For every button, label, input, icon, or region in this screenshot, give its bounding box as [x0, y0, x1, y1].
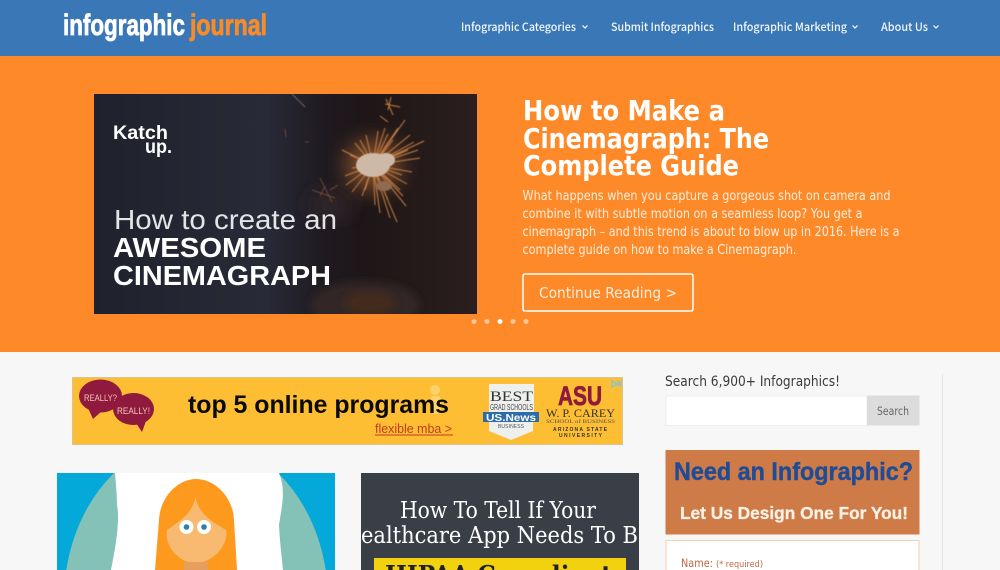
card: illustrated woman — [57, 473, 335, 570]
contact form: (* required) — [716, 560, 763, 570]
hero image: cinemagraph sparkler photo — [94, 94, 477, 314]
ASU W. P. Carey logo: SCHOOL of BUSINESS — [546, 420, 615, 425]
carousel dots — [472, 319, 528, 324]
brand mark: Katchup: Katch — [113, 123, 168, 144]
ad link: flexible mba > — [375, 422, 452, 436]
call to action: need an infographic: Let Us Design One For You! — [680, 503, 908, 523]
badge: US News best grad schools: BEST — [490, 389, 533, 405]
icon: woman portrait — [155, 479, 237, 570]
sidebar search — [665, 374, 920, 426]
hero description: complete guide on how to make a Cinemagraph. — [522, 243, 796, 258]
search button: Search — [877, 404, 909, 418]
icon: speech bubbles — [79, 380, 154, 432]
contact form: Name: — [681, 556, 713, 570]
hero description: What happens when you capture a gorgeous shot on camera and — [522, 189, 890, 204]
navigation menu: About Us — [881, 19, 928, 35]
image headline: CINEMAGRAPH — [113, 260, 331, 291]
badge: US News best grad schools — [483, 384, 539, 440]
search heading: Search 6,900+ Infographics! — [665, 374, 840, 390]
sidebar rule — [942, 374, 943, 570]
badge: US News best grad schools: GRAD SCHOOLS — [490, 402, 533, 412]
header bar — [0, 0, 1000, 56]
image headline: How to create an — [114, 204, 337, 235]
ad choices icons — [612, 380, 622, 388]
icon: speech bubbles: REALLY! — [117, 406, 150, 416]
ASU W. P. Carey logo — [546, 381, 615, 439]
navigation menu: Submit Infographics — [611, 19, 714, 35]
icon: sparkler rays — [285, 94, 424, 222]
ASU W. P. Carey logo: W. P. CAREY — [546, 406, 615, 420]
image headline: AWESOME — [113, 232, 266, 263]
ad headline: top 5 online programs — [188, 391, 449, 419]
hero headline: Complete Guide — [523, 149, 739, 182]
navigation menu: Infographic Categories — [461, 19, 576, 35]
ASU W. P. Carey logo: ARIZONA STATE — [553, 427, 608, 433]
brand mark: Katchup — [113, 123, 172, 158]
faint figure watermark — [430, 385, 441, 414]
hand holding sparkler — [310, 281, 420, 329]
hero description: cinemagraph – and this trend is about to blow up in 2016. Here is a — [522, 225, 900, 240]
brand mark: Katchup: up. — [145, 137, 172, 158]
logo: infographic — [63, 9, 185, 42]
hero description: combine it with subtle motion on a seamless loop? You get a — [522, 207, 862, 222]
card: healthcare app — [361, 473, 639, 570]
hero description — [522, 189, 900, 258]
ad banner — [72, 378, 622, 444]
hero headline: Cinemagraph: The — [523, 122, 769, 155]
icon: speech bubbles: REALLY? — [84, 393, 117, 403]
navigation menu: Infographic Marketing — [733, 19, 847, 35]
continue reading button: Continue Reading > — [539, 284, 677, 302]
hero banner — [0, 56, 1000, 352]
image headline — [113, 204, 337, 291]
call to action: need an infographic — [666, 450, 920, 534]
ASU W. P. Carey logo: UNIVERSITY — [559, 433, 603, 439]
continue reading button — [523, 274, 693, 311]
card heading: How To Tell If Your — [400, 498, 596, 524]
navigation menu — [461, 19, 938, 35]
logo: journal — [189, 9, 267, 42]
badge: US News best grad schools: BUSINESS — [498, 424, 525, 430]
search input — [666, 396, 867, 426]
hero headline — [523, 94, 769, 182]
contact form — [666, 540, 919, 570]
hero headline: How to Make a — [523, 94, 725, 127]
card heading — [361, 498, 638, 549]
call to action: need an infographic: Need an Infographic? — [674, 458, 913, 486]
badge: US News best grad schools: US.News — [486, 412, 536, 424]
search button — [867, 396, 920, 426]
ASU W. P. Carey logo: ASU — [558, 381, 602, 411]
